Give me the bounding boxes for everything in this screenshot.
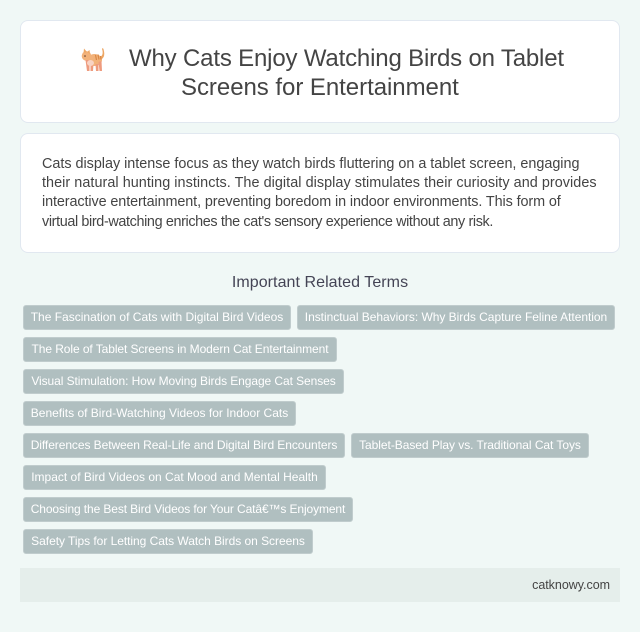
footer source: catknowy.com [532, 578, 610, 592]
tag: Benefits of Bird-Watching Videos for Indoor Cats [31, 406, 288, 420]
tag: Safety Tips for Letting Cats Watch Birds on Screens [31, 534, 305, 548]
tag [297, 305, 615, 330]
description text: Cats display intense focus as they watch birds fluttering on a tablet screen, engaging [42, 156, 579, 172]
tag: Visual Stimulation: How Moving Birds Engage Cat Senses [31, 374, 336, 388]
footer bar [20, 568, 620, 602]
tag [23, 305, 291, 330]
tag: Impact of Bird Videos on Cat Mood and Mental Health [31, 470, 318, 484]
tag list [23, 305, 615, 554]
tag [23, 529, 313, 554]
tag [23, 401, 296, 426]
tag: Instinctual Behaviors: Why Birds Capture Feline Attention [305, 310, 607, 324]
tag: Differences Between Real-Life and Digital Bird Encounters [31, 438, 337, 452]
tag [23, 433, 345, 458]
panel: description card [20, 133, 620, 253]
tag [351, 433, 589, 458]
tag [23, 337, 337, 362]
description text [42, 156, 597, 230]
tag: Tablet-Based Play vs. Traditional Cat Toys [359, 438, 581, 452]
description text: their natural hunting instincts. The digital display stimulates their curiosity and provides [42, 175, 597, 191]
tag [23, 465, 326, 490]
tag: Choosing the Best Bird Videos for Your Catâ€™s Enjoyment [31, 502, 345, 516]
description text: interactive entertainment, preventing boredom in indoor environments. This form of [42, 194, 561, 210]
tag [23, 369, 344, 394]
section heading: Important Related Terms [232, 274, 408, 291]
title: Why Cats Enjoy Watching Birds on Tablet [129, 45, 564, 72]
tag: The Role of Tablet Screens in Modern Cat Entertainment [32, 342, 328, 356]
panel: title card [20, 20, 620, 123]
title: Screens for Entertainment [181, 74, 459, 101]
title [129, 45, 564, 101]
tag: The Fascination of Cats with Digital Bird Videos [31, 310, 283, 324]
tag [23, 497, 353, 522]
description text: virtual bird-watching enriches the cat's sensory experience without any risk. [42, 214, 493, 230]
icon: cat [82, 48, 104, 71]
